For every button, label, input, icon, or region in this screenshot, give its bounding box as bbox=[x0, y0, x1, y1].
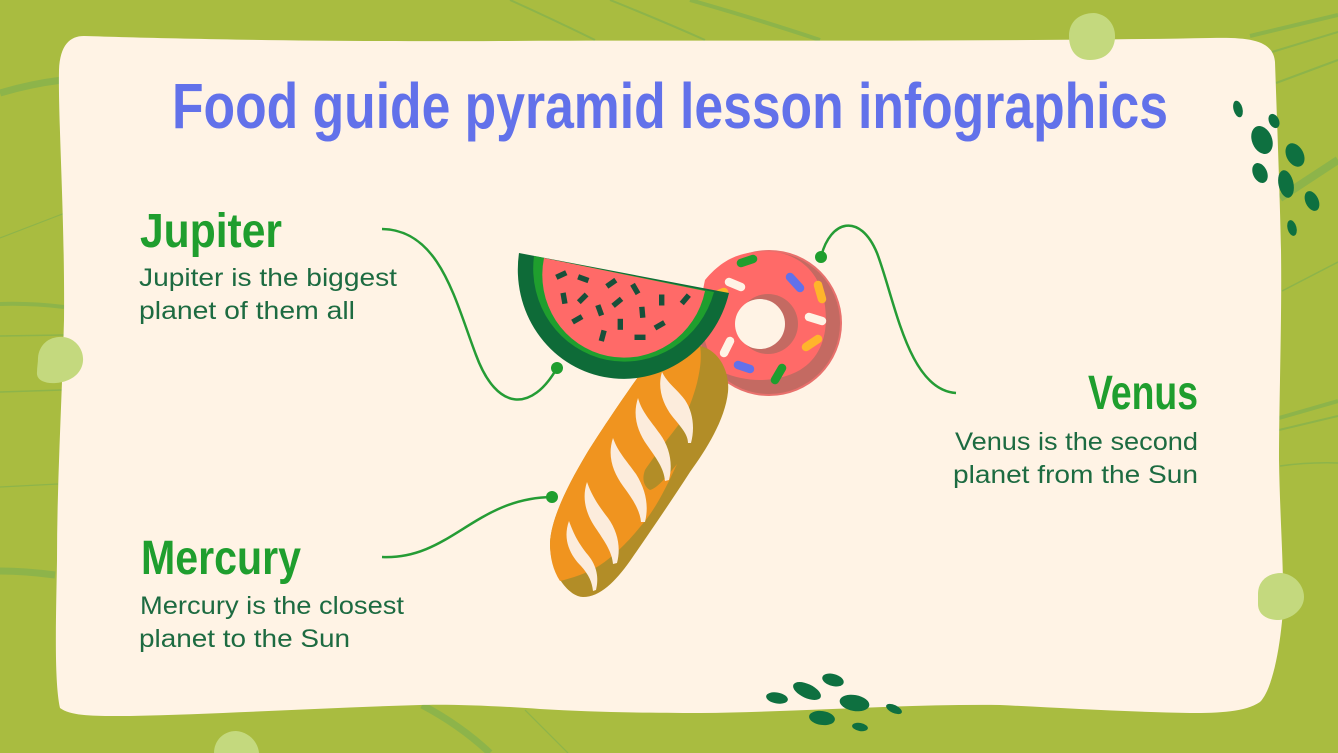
description: Mercury: planet to the Sun bbox=[139, 625, 350, 653]
description: Venus: planet from the Sun bbox=[953, 461, 1198, 489]
text block: Venus bbox=[953, 367, 1198, 489]
heading: Jupiter: Jupiter bbox=[140, 205, 282, 258]
text block: Jupiter bbox=[139, 205, 397, 325]
text block: Mercury bbox=[139, 532, 404, 653]
connector: Venus bbox=[815, 226, 956, 393]
icon: baguette bbox=[550, 346, 728, 597]
leaves: top right bbox=[1231, 100, 1322, 237]
icon: watermelon bbox=[518, 253, 729, 379]
decorative blob: top right bbox=[1069, 13, 1115, 60]
connector: Jupiter bbox=[382, 229, 563, 400]
description: Jupiter: planet of them all bbox=[139, 297, 355, 325]
description: Jupiter: Jupiter is the biggest bbox=[139, 264, 397, 292]
connector: Mercury bbox=[382, 491, 558, 557]
heading: Mercury: Mercury bbox=[141, 532, 301, 585]
decorative blob: right bbox=[1258, 573, 1304, 620]
decorative blob: bottom bbox=[214, 731, 259, 753]
icon: donut bbox=[696, 250, 842, 396]
leaves: bottom bbox=[765, 671, 903, 732]
decorative blob: left bbox=[37, 337, 83, 383]
description: Venus: Venus is the second bbox=[955, 428, 1198, 456]
description: Mercury: Mercury is the closest bbox=[140, 592, 404, 620]
heading: Venus: Venus bbox=[1088, 367, 1198, 420]
